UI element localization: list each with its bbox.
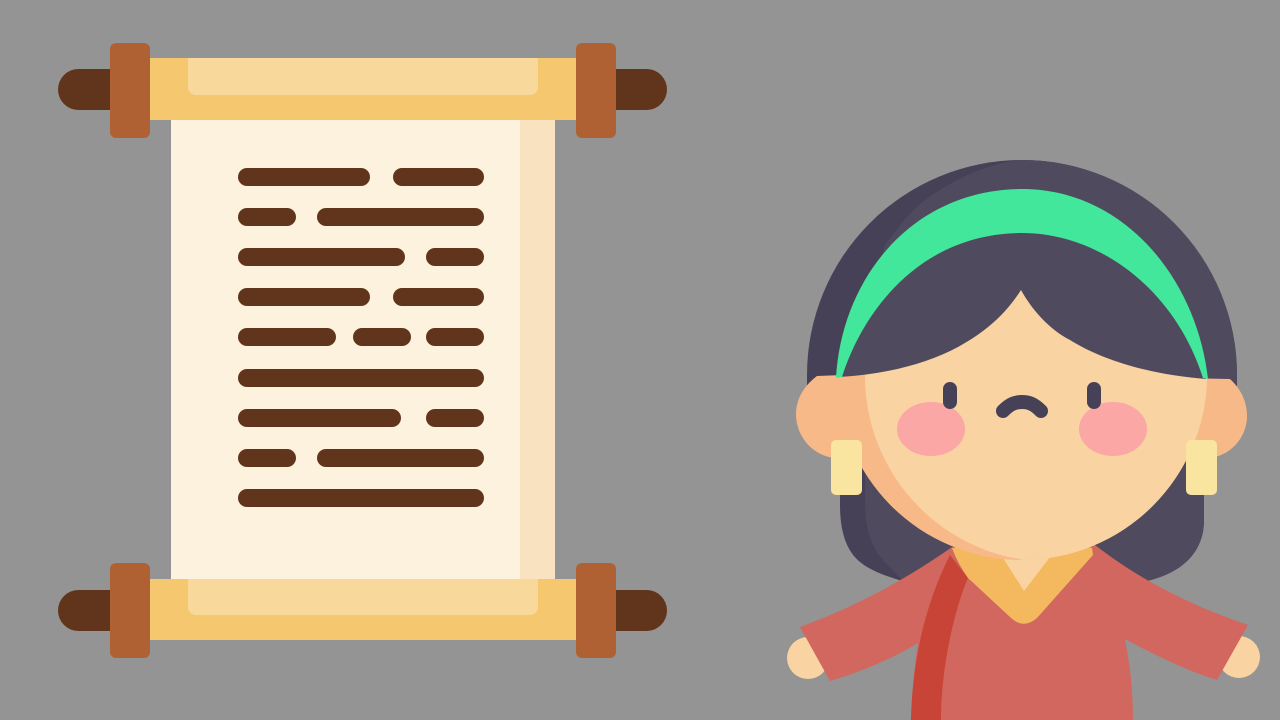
green headband [836, 189, 1208, 379]
face [837, 280, 1207, 560]
icon: parchment scroll [58, 43, 667, 658]
icon: sad girl character [787, 160, 1260, 720]
robe collar [952, 540, 1093, 624]
scroll paper [171, 118, 555, 581]
back hair [807, 160, 1237, 581]
eyes [943, 382, 1101, 409]
hands [787, 636, 1260, 679]
fringe [838, 225, 1206, 379]
robe red stripe [911, 555, 968, 720]
robe [800, 545, 1248, 720]
earrings [831, 440, 1217, 495]
neck [998, 550, 1050, 591]
ears [796, 374, 1247, 458]
cheeks [897, 402, 1147, 456]
bottom roller [58, 563, 667, 658]
sad mouth [1003, 402, 1041, 411]
scroll text lines [238, 168, 484, 507]
top roller [58, 43, 667, 138]
